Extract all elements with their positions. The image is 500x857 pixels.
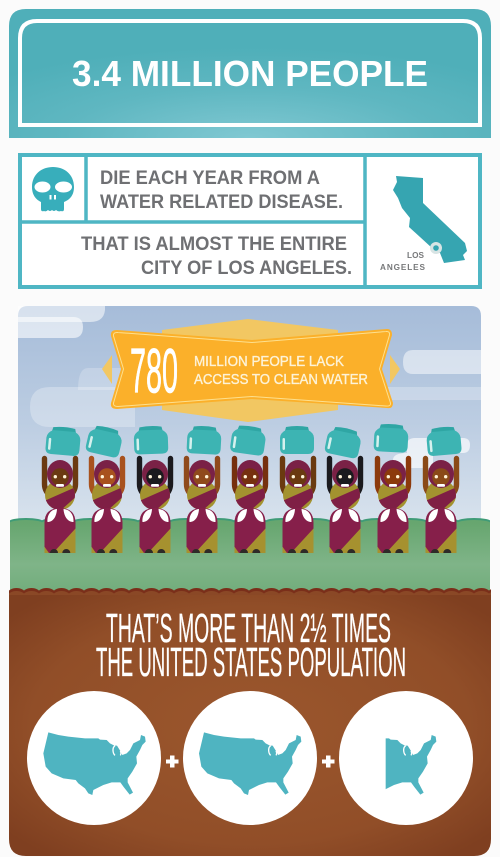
icon: plus — [322, 756, 334, 768]
text: die each year — [100, 167, 343, 213]
text: Los Angeles comparison: CITY OF LOS ANGELES. — [141, 257, 352, 279]
circle: half United States map — [334, 691, 473, 825]
text: lack clean water — [194, 354, 368, 388]
banner: 780 million people: 780 — [130, 336, 178, 406]
icon: plus — [166, 756, 178, 768]
icon: California map — [393, 176, 467, 263]
label: Los Angeles: LOS — [407, 251, 425, 260]
woman 6 with water jar — [280, 426, 316, 554]
panel: soil — [9, 587, 491, 856]
woman 5 with water jar — [229, 424, 268, 554]
text: die each year: WATER RELATED DISEASE. — [100, 191, 343, 213]
label: Los Angeles — [380, 251, 426, 272]
text: die each year: DIE EACH YEAR FROM A — [100, 167, 320, 189]
header panel: 3.4 million people — [9, 9, 491, 138]
woman 9 with water jar — [423, 426, 462, 554]
woman 1 with water jar — [42, 426, 81, 554]
banner: 780 million people — [102, 319, 400, 422]
circle: second United States map — [183, 691, 317, 825]
clouds — [18, 306, 481, 468]
woman 3 with water jar — [133, 425, 173, 554]
text: Los Angeles comparison: THAT IS ALMOST THE ENTIRE — [81, 233, 347, 255]
woman 8 with water jar — [373, 423, 411, 554]
text: lack clean water: MILLION PEOPLE LACK — [194, 354, 344, 370]
title: 3.4 MILLION PEOPLE — [72, 53, 428, 94]
woman 2 with water jar — [85, 424, 125, 554]
circle: full United States map — [27, 691, 161, 825]
text: lack clean water: ACCESS TO CLEAN WATER — [194, 372, 368, 388]
label: Los Angeles: ANGELES — [380, 263, 426, 272]
grass band — [10, 516, 490, 592]
panel: sky scene — [18, 306, 481, 540]
icon: skull — [32, 167, 74, 211]
text: Los Angeles comparison — [81, 233, 352, 279]
woman 7 with water jar — [324, 425, 363, 554]
heading: population comparison — [96, 605, 406, 685]
panel: death statistic — [20, 155, 480, 287]
woman 4 with water jar — [184, 425, 222, 554]
